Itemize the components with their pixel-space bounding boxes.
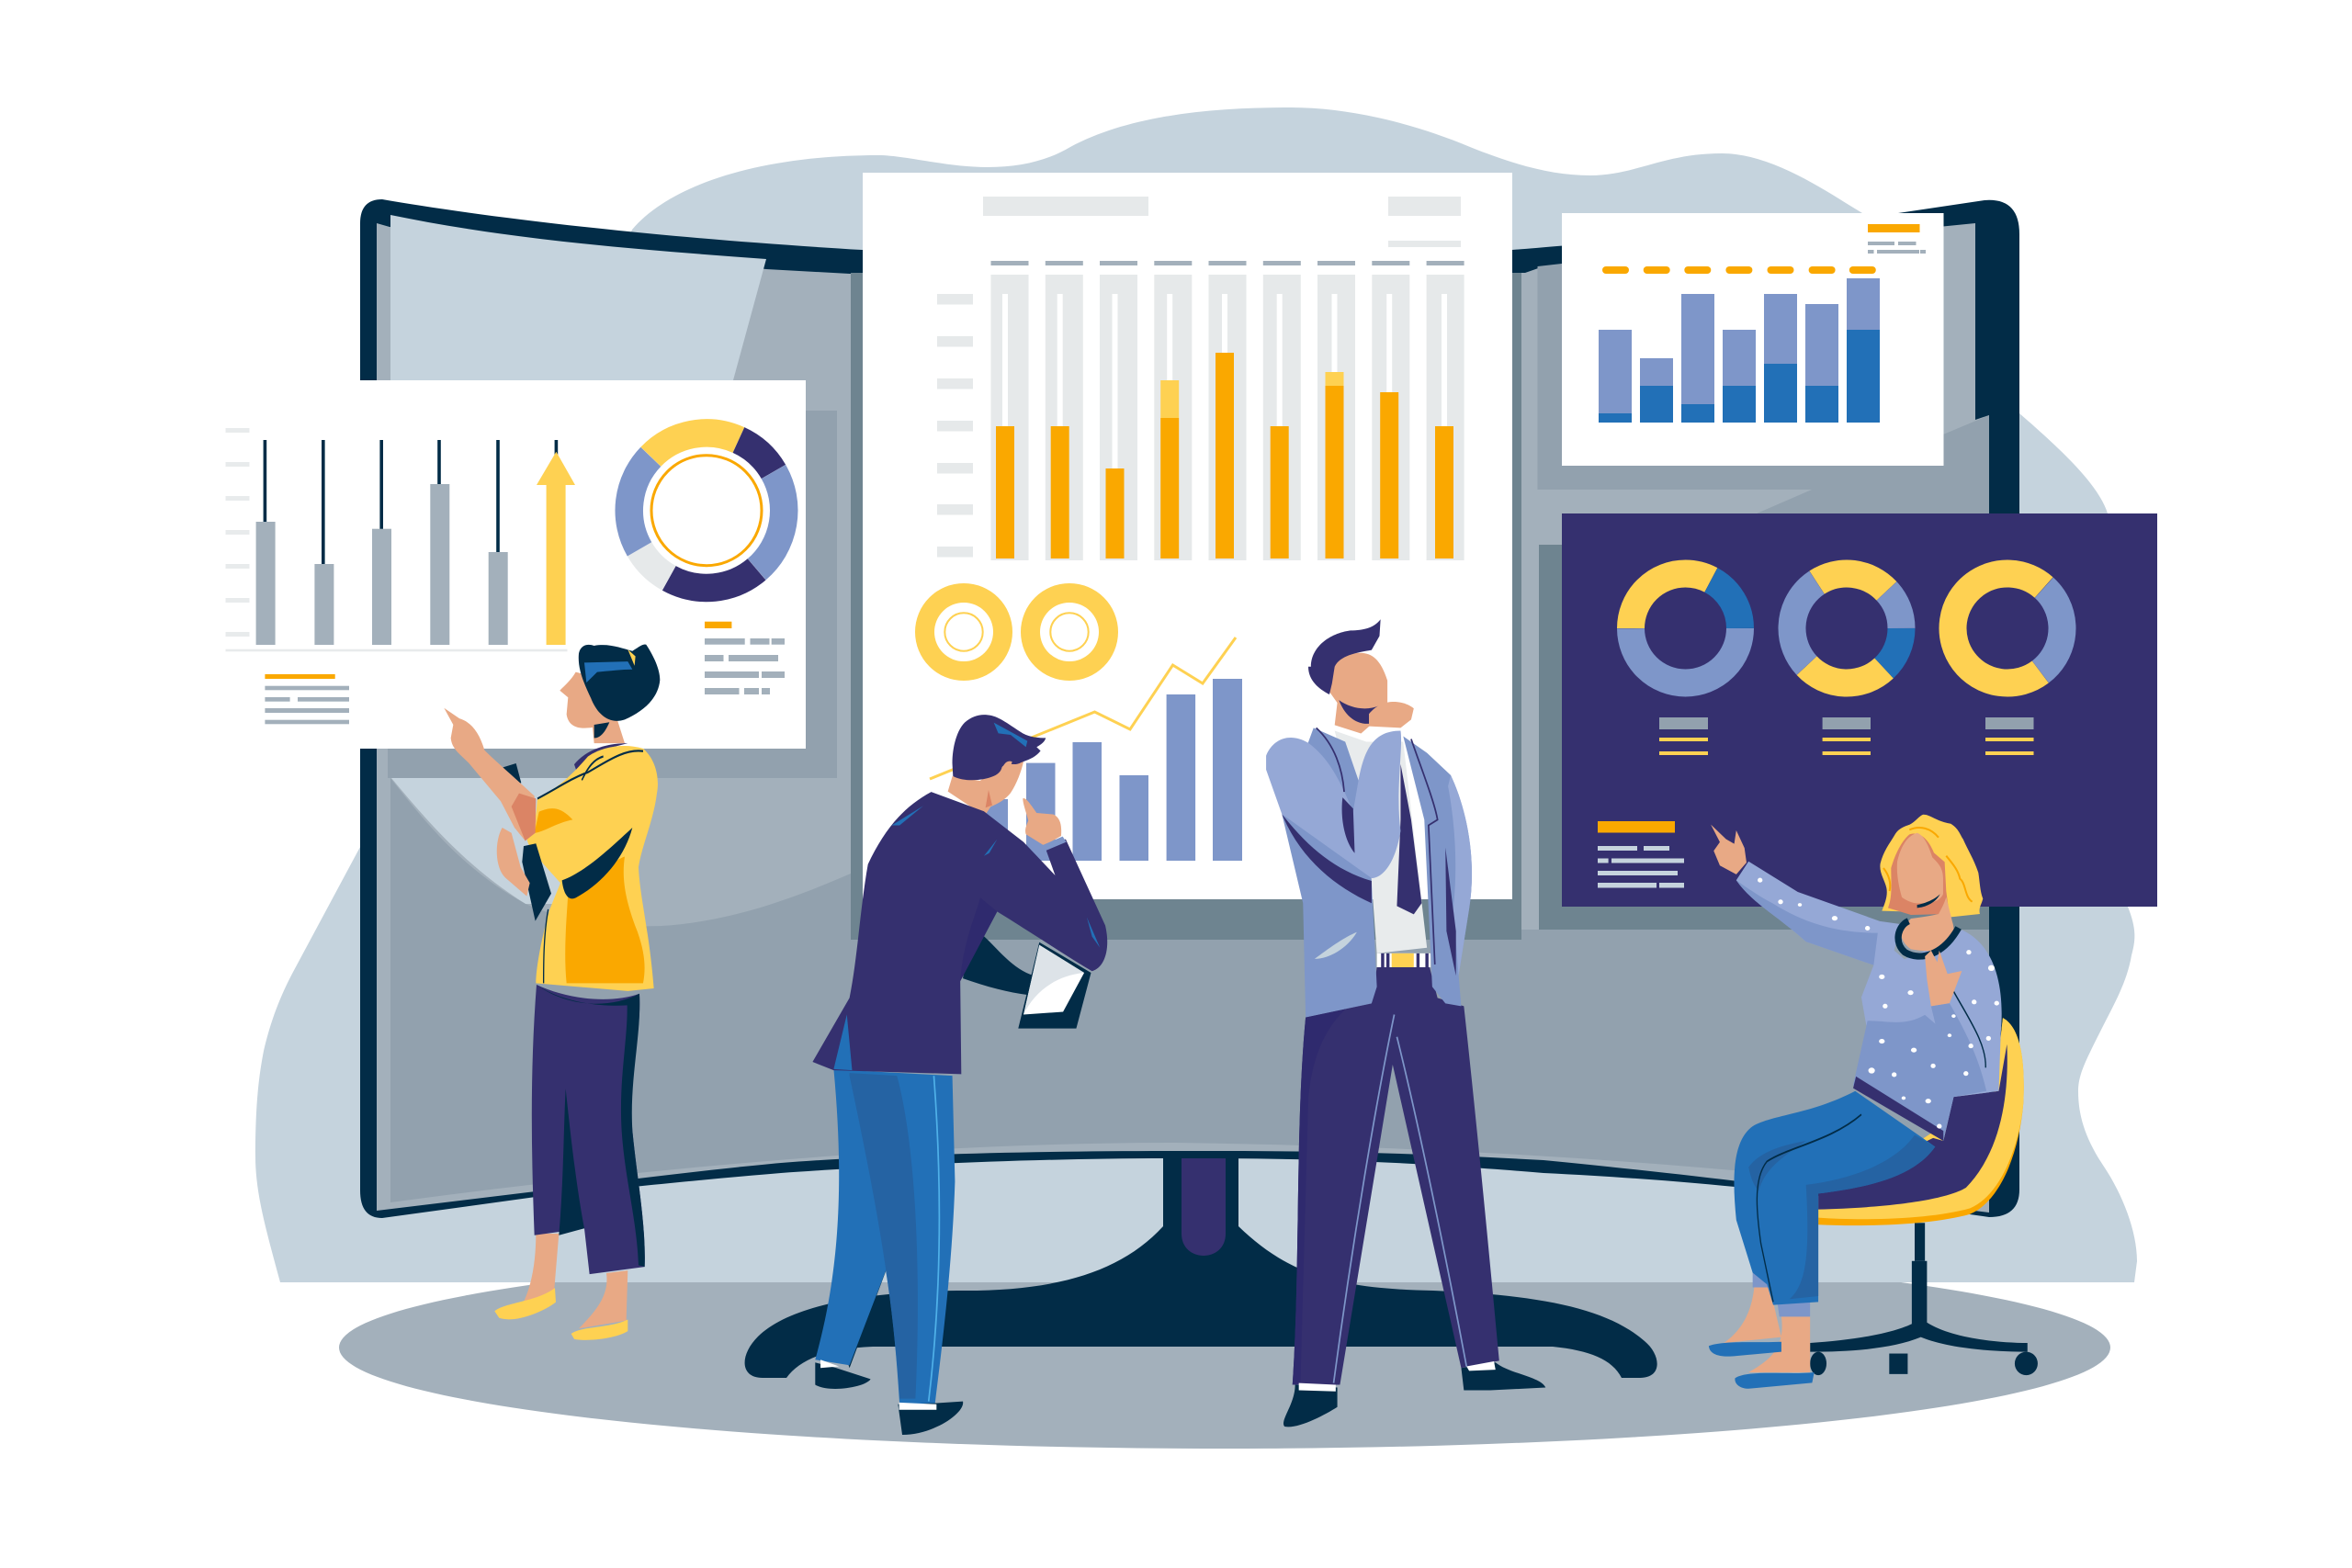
man jacket bbox=[812, 792, 1107, 1074]
orange bars bbox=[996, 353, 1453, 558]
figure: woman with tablet in yellow jacket bbox=[444, 644, 660, 1340]
legend right bbox=[705, 622, 785, 694]
shadow of dark panel bbox=[1539, 545, 1989, 930]
man shoes bbox=[1283, 1361, 1545, 1427]
grey bars bbox=[256, 484, 508, 645]
woman head bbox=[560, 644, 660, 743]
figure: man bending with tablet bbox=[812, 715, 1107, 1435]
man trousers bbox=[1293, 967, 1499, 1384]
man trousers bbox=[815, 1069, 955, 1404]
monitor stand bbox=[745, 1151, 1657, 1378]
donut 3 bbox=[1930, 551, 2085, 705]
man jacket bbox=[1266, 728, 1472, 1018]
man shirt bbox=[1335, 730, 1427, 953]
shadow of centre panel bbox=[851, 273, 1521, 940]
legend bbox=[1598, 821, 1684, 887]
woman jacket bbox=[526, 743, 658, 991]
legend left bbox=[265, 674, 349, 724]
light fold top left bbox=[390, 215, 766, 380]
monitor screen bbox=[377, 223, 1989, 1213]
man tie bbox=[1396, 764, 1421, 914]
column backgrounds bbox=[990, 275, 1464, 560]
yellow arrow bbox=[537, 452, 575, 645]
yellow rings bbox=[915, 583, 1118, 681]
woman arms bbox=[444, 708, 536, 897]
monitor frame bbox=[360, 199, 2019, 1218]
woman hands bbox=[1711, 825, 1962, 1006]
column top dashes bbox=[990, 261, 1464, 265]
man tablet bbox=[1018, 942, 1091, 1029]
woman shoes bbox=[494, 1288, 628, 1340]
woman feet bbox=[521, 1234, 628, 1328]
woman feet bbox=[1724, 1281, 1810, 1372]
axis ticks bbox=[226, 428, 568, 651]
axis ticks bbox=[937, 294, 973, 557]
stacked bars dark bbox=[1599, 330, 1880, 423]
woman trousers bbox=[532, 985, 645, 1274]
man tablet arm bbox=[963, 934, 1035, 995]
figure: standing man thinking bbox=[1266, 619, 1545, 1427]
dashed target line bbox=[1602, 266, 1876, 274]
shadow of left panel bbox=[388, 411, 837, 778]
legend bbox=[1868, 224, 1926, 254]
woman head bbox=[1880, 815, 1983, 956]
man shoes bbox=[815, 1359, 963, 1435]
panel: top right chart bbox=[1562, 213, 1944, 466]
chair base bbox=[1810, 1223, 2038, 1375]
column white slots bbox=[1002, 294, 1447, 473]
panel: dark donuts bbox=[1562, 513, 2157, 907]
man hand bbox=[1023, 798, 1067, 851]
floor ellipse bbox=[339, 1247, 2110, 1449]
woman tablet bbox=[501, 763, 551, 921]
sweater dots bbox=[1758, 878, 1999, 1129]
shadow of top right panel bbox=[1538, 220, 1989, 513]
figure: seated woman on chair bbox=[1709, 815, 2038, 1389]
man head bbox=[948, 715, 1046, 816]
chair seat bbox=[1818, 1018, 2024, 1225]
blue bars bbox=[979, 679, 1242, 861]
donut captions bbox=[1659, 717, 2034, 755]
donut 1 bbox=[1611, 555, 1759, 702]
stacked bars light bbox=[1599, 278, 1880, 413]
panel: left chart bbox=[225, 380, 816, 749]
monitor bbox=[360, 199, 2019, 1218]
donut chart bbox=[597, 401, 816, 620]
trend line bbox=[930, 637, 1236, 779]
background blob bbox=[255, 107, 2141, 1282]
whisker lines bbox=[264, 440, 558, 569]
screen lower area bbox=[390, 778, 1989, 1202]
woman jeans bbox=[1734, 1091, 1935, 1316]
man belt bbox=[1377, 953, 1430, 967]
donut 2 bbox=[1770, 551, 1924, 705]
man head and hand bbox=[1308, 619, 1414, 733]
panel: centre chart bbox=[863, 173, 1512, 899]
header bars bbox=[983, 197, 1461, 247]
woman sweater bbox=[1736, 862, 2002, 1141]
lower fold light bbox=[391, 778, 570, 904]
woman shoes bbox=[1709, 1342, 1815, 1389]
